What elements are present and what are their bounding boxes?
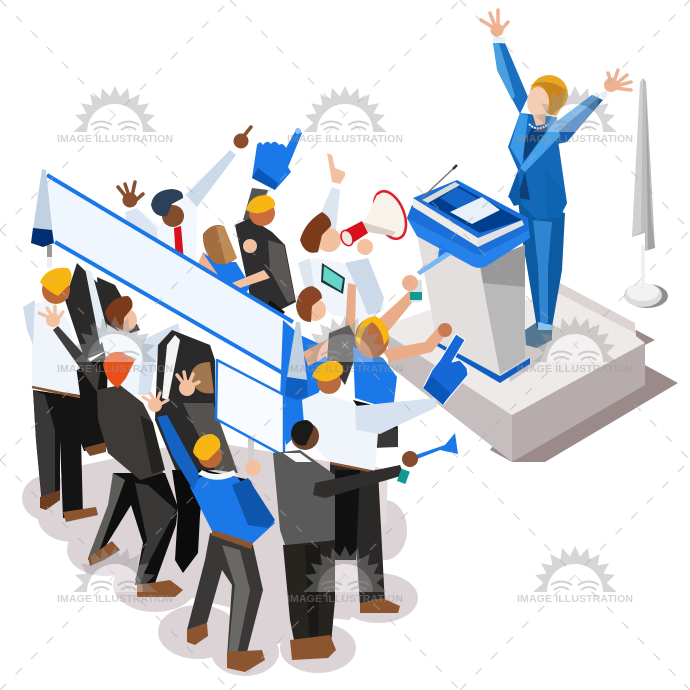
platform stage: [388, 283, 678, 462]
placard sign: [216, 360, 284, 470]
woman trousers: [518, 200, 565, 330]
person: woman with blue top hugging: [193, 225, 270, 295]
banner: [31, 169, 293, 379]
crowd floor shadows: [22, 440, 418, 676]
watermark bottom centre: IMAGE ILLUSTRATION: [287, 593, 403, 605]
podium top band: [407, 205, 530, 268]
watermark middle centre: IMAGE ILLUSTRATION: [287, 363, 403, 375]
watermark top centre: [287, 86, 403, 145]
watermark bottom right: [517, 546, 633, 605]
watermark middle right: IMAGE ILLUSTRATION: [517, 363, 633, 375]
hands of man: [118, 127, 251, 208]
woman hands: [481, 10, 631, 92]
podium: [407, 165, 530, 383]
lectern top: [413, 180, 528, 247]
watermark middle left: [57, 316, 173, 375]
woman shoes: [525, 322, 552, 348]
person: man with megaphone: [298, 153, 412, 322]
watermark top left: IMAGE ILLUSTRATION: [57, 133, 173, 145]
person: man in white shirt with foam hand: [302, 334, 468, 613]
banner right pole: [285, 322, 308, 400]
person: man in dark suit with tan head: [155, 330, 260, 580]
person: man in white shirt brown hair: [100, 296, 180, 395]
watermark top right: IMAGE ILLUSTRATION: [517, 133, 633, 145]
person: woman in blue sleeveless top: [353, 243, 452, 528]
woman jacket: [508, 113, 567, 220]
person: man in blue sweater: [143, 393, 275, 672]
person: man in white shirt far left: [23, 268, 98, 522]
woman raised arms: [493, 36, 608, 145]
banner left pole: [31, 169, 54, 268]
person: woman with tablet: [280, 263, 360, 445]
watermark top right: [517, 86, 633, 145]
podium body: [417, 235, 525, 376]
watermark bottom left: IMAGE ILLUSTRATION: [57, 593, 173, 605]
candidate woman in blue suit: [481, 10, 631, 348]
woman head: [527, 75, 568, 126]
watermark middle right: [517, 316, 633, 375]
watermark middle centre: [287, 316, 403, 375]
person: man in dark jacket with red hair: [39, 306, 183, 597]
paper sheet: [450, 197, 500, 224]
watermark bottom right: IMAGE ILLUSTRATION: [517, 593, 633, 605]
person: man in white shirt with red tie: [118, 127, 251, 270]
megaphone: [339, 187, 412, 255]
banner cloth: [47, 175, 293, 379]
watermark bottom left: [57, 546, 173, 605]
raised hand: [327, 153, 345, 184]
person: man in black jacket behind banner: [62, 263, 140, 456]
water bottle: [410, 280, 422, 302]
bottle lower: [397, 469, 410, 484]
person: man in grey jacket with vuvuzela: [273, 420, 458, 660]
microphone: [421, 165, 457, 199]
podium base: [437, 339, 530, 383]
watermark top left: [57, 86, 173, 145]
flag furled on stand: [624, 78, 668, 308]
person: man in black jacket holding foam hand: [235, 128, 302, 318]
watermark top centre: IMAGE ILLUSTRATION: [287, 133, 403, 145]
foam hand right: [423, 334, 468, 405]
vuvuzela at podium: [417, 243, 452, 275]
watermark bottom centre: [287, 546, 403, 605]
vuvuzela lower: [410, 433, 458, 461]
foam hand left: [252, 128, 302, 190]
watermark middle left: IMAGE ILLUSTRATION: [57, 363, 173, 375]
